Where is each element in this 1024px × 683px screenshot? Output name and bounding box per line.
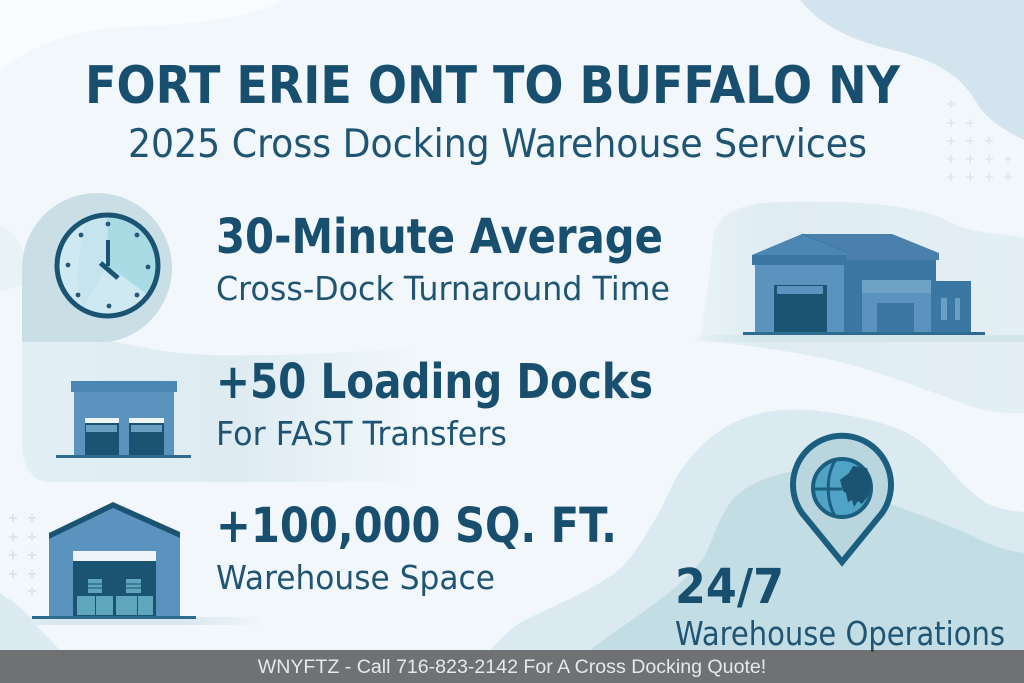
stat: 24/7 operations: 24/7 [675, 559, 784, 615]
footer bar [0, 650, 1024, 683]
stat: loading docks: +50 Loading Docks [216, 354, 653, 410]
icon: large warehouse building [690, 234, 1024, 342]
subtitle: 2025 Cross Docking Warehouse Services [128, 122, 867, 167]
icon: loading dock building [56, 381, 191, 458]
stat: turnaround time [216, 209, 670, 308]
stat: 24/7 operations [675, 559, 1005, 653]
stat: turnaround time: 30-Minute Average [216, 209, 663, 265]
stat: loading docks: For FAST Transfers [216, 414, 507, 453]
stat: turnaround time: Cross-Dock Turnaround Time [216, 269, 670, 308]
decorative plus marks, bottom left [9, 514, 36, 595]
footer bar: WNYFTZ - Call 716-823-2142 For A Cross Docking Quote! [258, 656, 766, 678]
title: FORT ERIE ONT TO BUFFALO NY [85, 56, 901, 116]
icon: location pin with globe [793, 436, 891, 562]
icon: clock [57, 215, 158, 316]
stat: warehouse space: +100,000 SQ. FT. [216, 498, 617, 554]
stat: warehouse space [216, 498, 617, 597]
decorative plus marks, top right [947, 100, 1012, 181]
stat: warehouse space: Warehouse Space [216, 558, 495, 597]
icon: warehouse with pallets [0, 502, 265, 625]
stat: loading docks [216, 354, 653, 453]
